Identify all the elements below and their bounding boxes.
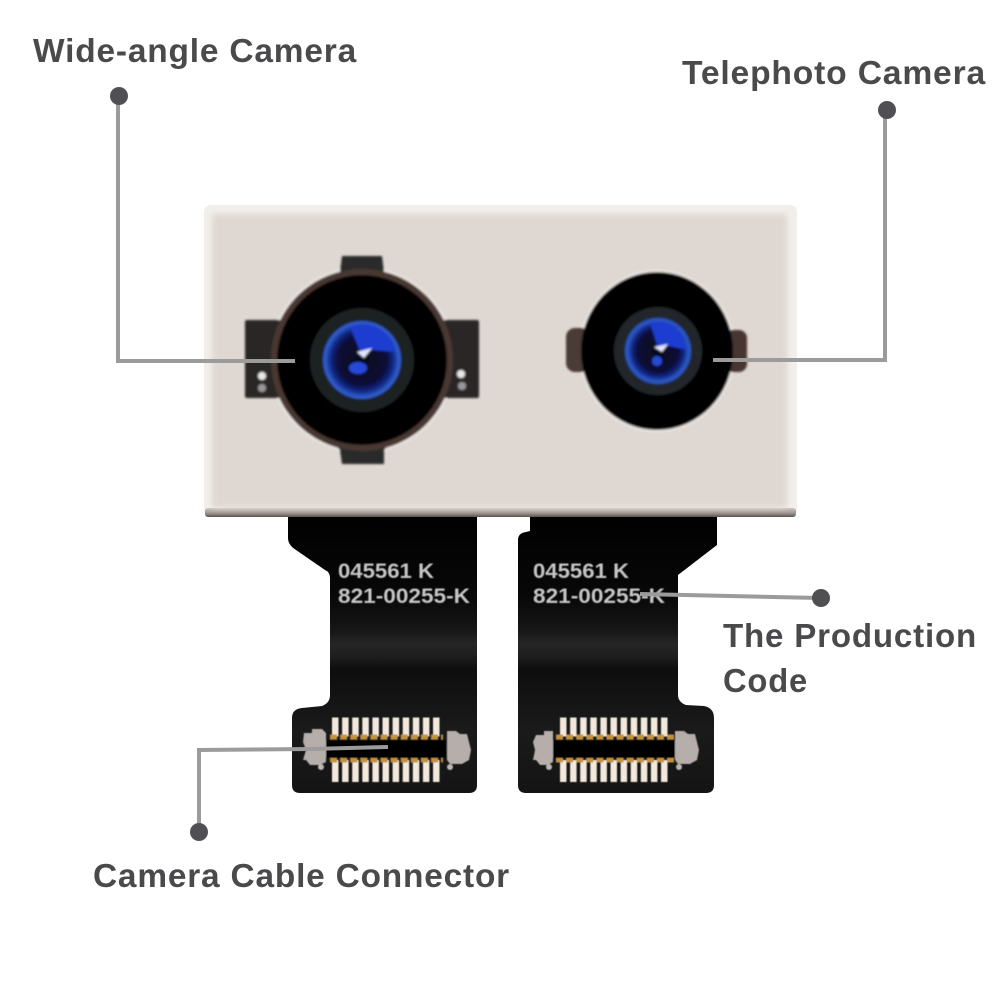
connector: right <box>533 727 699 771</box>
callout: telephoto camera: Telephoto Camera <box>682 54 986 91</box>
callout: camera cable connector: Camera Cable Connector <box>93 857 510 894</box>
production code: right: 045561 K <box>533 560 629 583</box>
callout: production code: Code <box>723 662 808 699</box>
callout: camera cable connector <box>93 747 510 894</box>
wide-angle camera lens <box>245 256 479 464</box>
production code: right: 821-00255-K <box>533 585 665 608</box>
flex cable: left <box>288 512 477 793</box>
connector: left <box>303 727 471 771</box>
telephoto camera lens <box>566 270 747 432</box>
production code: right <box>533 560 665 608</box>
callout: wide-angle camera <box>33 32 357 361</box>
callout: telephoto camera <box>682 54 986 360</box>
callout: wide-angle camera: Wide-angle Camera <box>33 32 357 69</box>
production code: left: 821-00255-K <box>338 585 470 608</box>
production code: left: 045561 K <box>338 560 434 583</box>
camera housing <box>204 205 797 517</box>
callout: production code <box>640 589 977 699</box>
flex cable: right <box>518 512 717 793</box>
production code: left <box>338 560 470 608</box>
callout: production code: The Production <box>723 617 977 654</box>
